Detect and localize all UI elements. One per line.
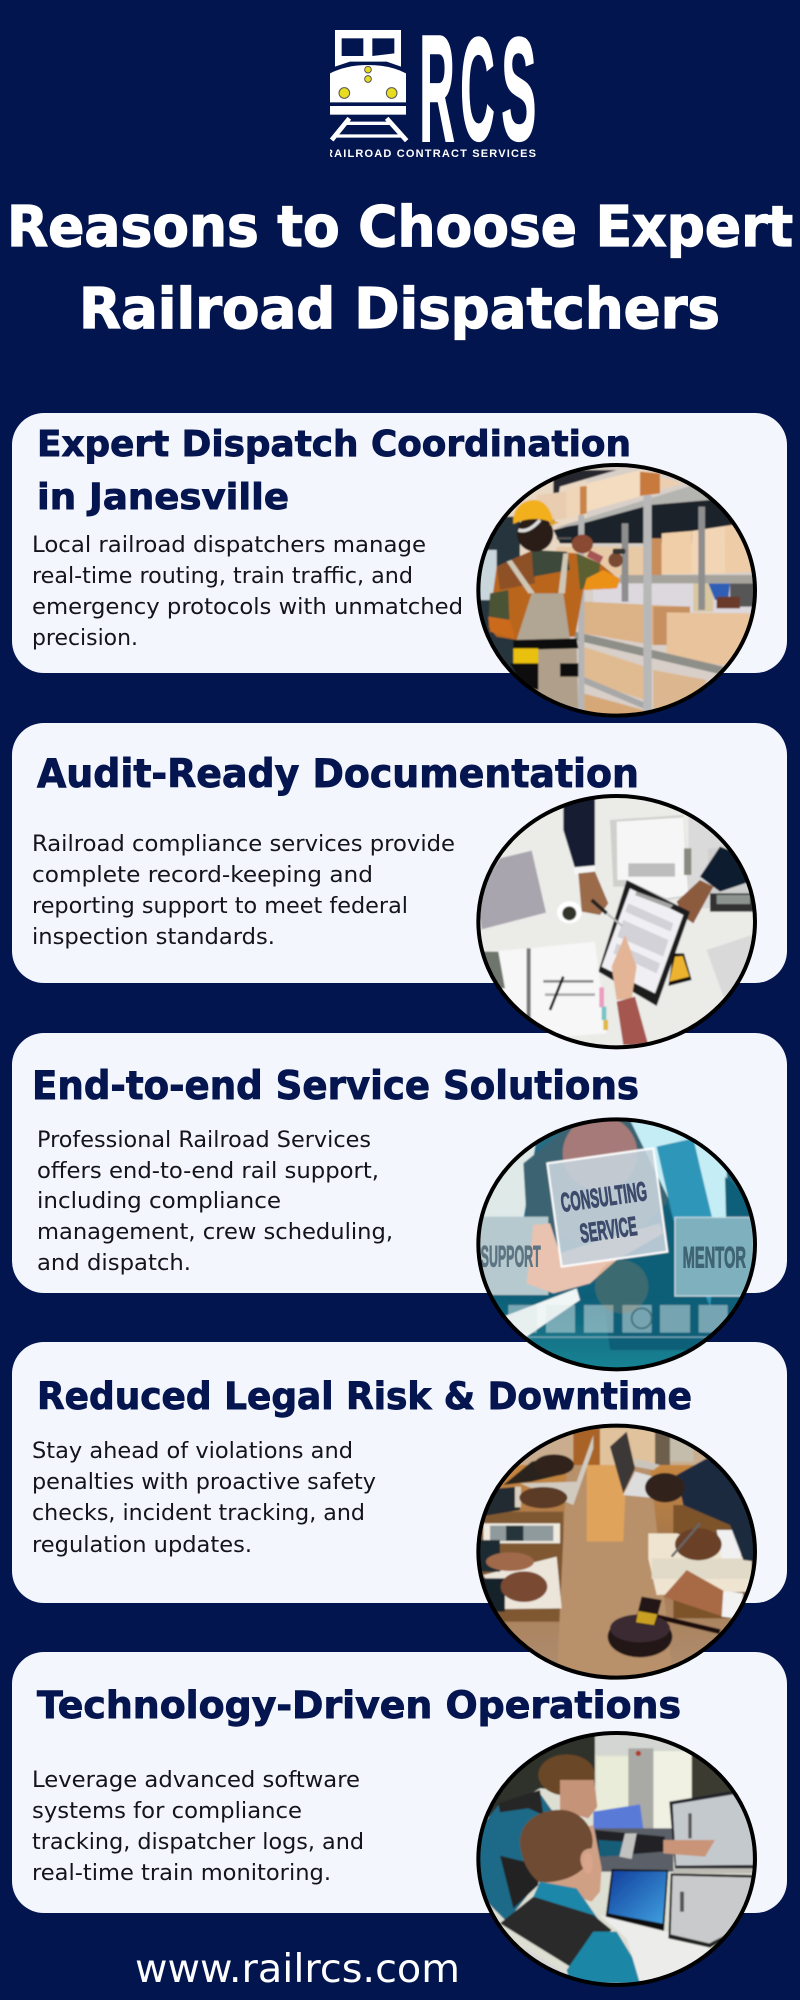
- photo: consulting service touch screen: SERVICE: [578, 1211, 639, 1249]
- photo: warehouse worker scanning boxes: [473, 460, 760, 720]
- text block: audit-ready documentation: complete record-keeping and: [32, 863, 373, 888]
- logo: RCS Railroad Contract Services: C: [460, 8, 495, 172]
- panel: end-to-end service solutions: [12, 1033, 787, 1293]
- text block: end-to-end service solutions: management, crew scheduling,: [37, 1220, 393, 1245]
- text block: expert dispatch coordination: emergency protocols with unmatched: [32, 595, 463, 620]
- text block: audit-ready documentation: Railroad compliance services provide: [32, 832, 455, 857]
- text block: technology-driven operations: real-time train monitoring.: [32, 1861, 331, 1886]
- text block: reduced legal risk and downtime: [32, 1439, 376, 1558]
- text block: technology-driven operations: systems for compliance: [32, 1799, 302, 1824]
- text block: expert dispatch coordination: precision.: [32, 626, 138, 651]
- text block: expert dispatch coordination: real-time routing, train traffic, and: [32, 564, 413, 589]
- text block: reduced legal risk and downtime: checks, incident tracking, and: [32, 1501, 365, 1526]
- heading: expert dispatch coordination: [37, 424, 631, 518]
- photo: hands reviewing documents on a clipboard: [473, 790, 760, 1053]
- text block: end-to-end service solutions: Professional Railroad Services: [37, 1128, 371, 1153]
- heading: audit-ready documentation: Audit-Ready Documentation: [37, 752, 639, 797]
- photo: two operators at control room monitors: [473, 1728, 760, 1995]
- panel: reduced legal risk and downtime: [12, 1342, 787, 1603]
- heading: end-to-end service solutions: End-to-end Service Solutions: [32, 1064, 639, 1109]
- text block: end-to-end service solutions: [37, 1128, 393, 1276]
- heading: expert dispatch coordination: in Janesville: [37, 477, 289, 518]
- text block: reduced legal risk and downtime: penalties with proactive safety: [32, 1470, 376, 1495]
- heading: technology-driven operations: Technology-Driven Operations: [37, 1684, 681, 1727]
- text block: audit-ready documentation: [32, 832, 455, 950]
- text block: end-to-end service solutions: and dispatch.: [37, 1251, 191, 1276]
- infographic canvas: S: [501, 8, 536, 172]
- text block: technology-driven operations: tracking, dispatcher logs, and: [32, 1830, 364, 1855]
- panel: audit-ready documentation: [12, 723, 787, 983]
- text block: expert dispatch coordination: Local railroad dispatchers manage: [32, 533, 426, 558]
- photo: consulting service touch screen: CONSULTING: [559, 1176, 649, 1218]
- text block: audit-ready documentation: reporting support to meet federal: [32, 894, 408, 919]
- text block: technology-driven operations: [32, 1768, 364, 1886]
- logo: RCS Railroad Contract Services: R: [419, 4, 455, 174]
- heading: reduced legal risk and downtime: Reduced Legal Risk & Downtime: [37, 1374, 692, 1418]
- logo: RCS Railroad Contract Services: RAILROAD CONTRACT SERVICES: [325, 148, 536, 160]
- text block: reduced legal risk and downtime: regulation updates.: [32, 1533, 252, 1558]
- photo: consulting service touch screen: SUPPORT: [481, 1241, 541, 1274]
- photo: legal meeting with gavel at wooden table: [473, 1422, 760, 1685]
- panel: expert dispatch coordination: [12, 413, 787, 673]
- text block: end-to-end service solutions: offers end-to-end rail support,: [37, 1159, 379, 1184]
- text block: end-to-end service solutions: including compliance: [37, 1189, 281, 1214]
- heading: expert dispatch coordination: Expert Dispatch Coordination: [37, 424, 631, 465]
- text block: audit-ready documentation: inspection standards.: [32, 925, 275, 950]
- text block: technology-driven operations: Leverage advanced software: [32, 1768, 360, 1793]
- text block: reduced legal risk and downtime: Stay ahead of violations and: [32, 1439, 353, 1464]
- logo: RCS Railroad Contract Services: [330, 30, 536, 157]
- photo: consulting service touch screen: [473, 1113, 760, 1377]
- panel: technology-driven operations: [12, 1652, 787, 1913]
- website url: www.railrcs.com: [135, 1947, 460, 1992]
- title: [7, 195, 793, 342]
- text block: expert dispatch coordination: [32, 533, 463, 651]
- title: Railroad Dispatchers: [79, 277, 720, 342]
